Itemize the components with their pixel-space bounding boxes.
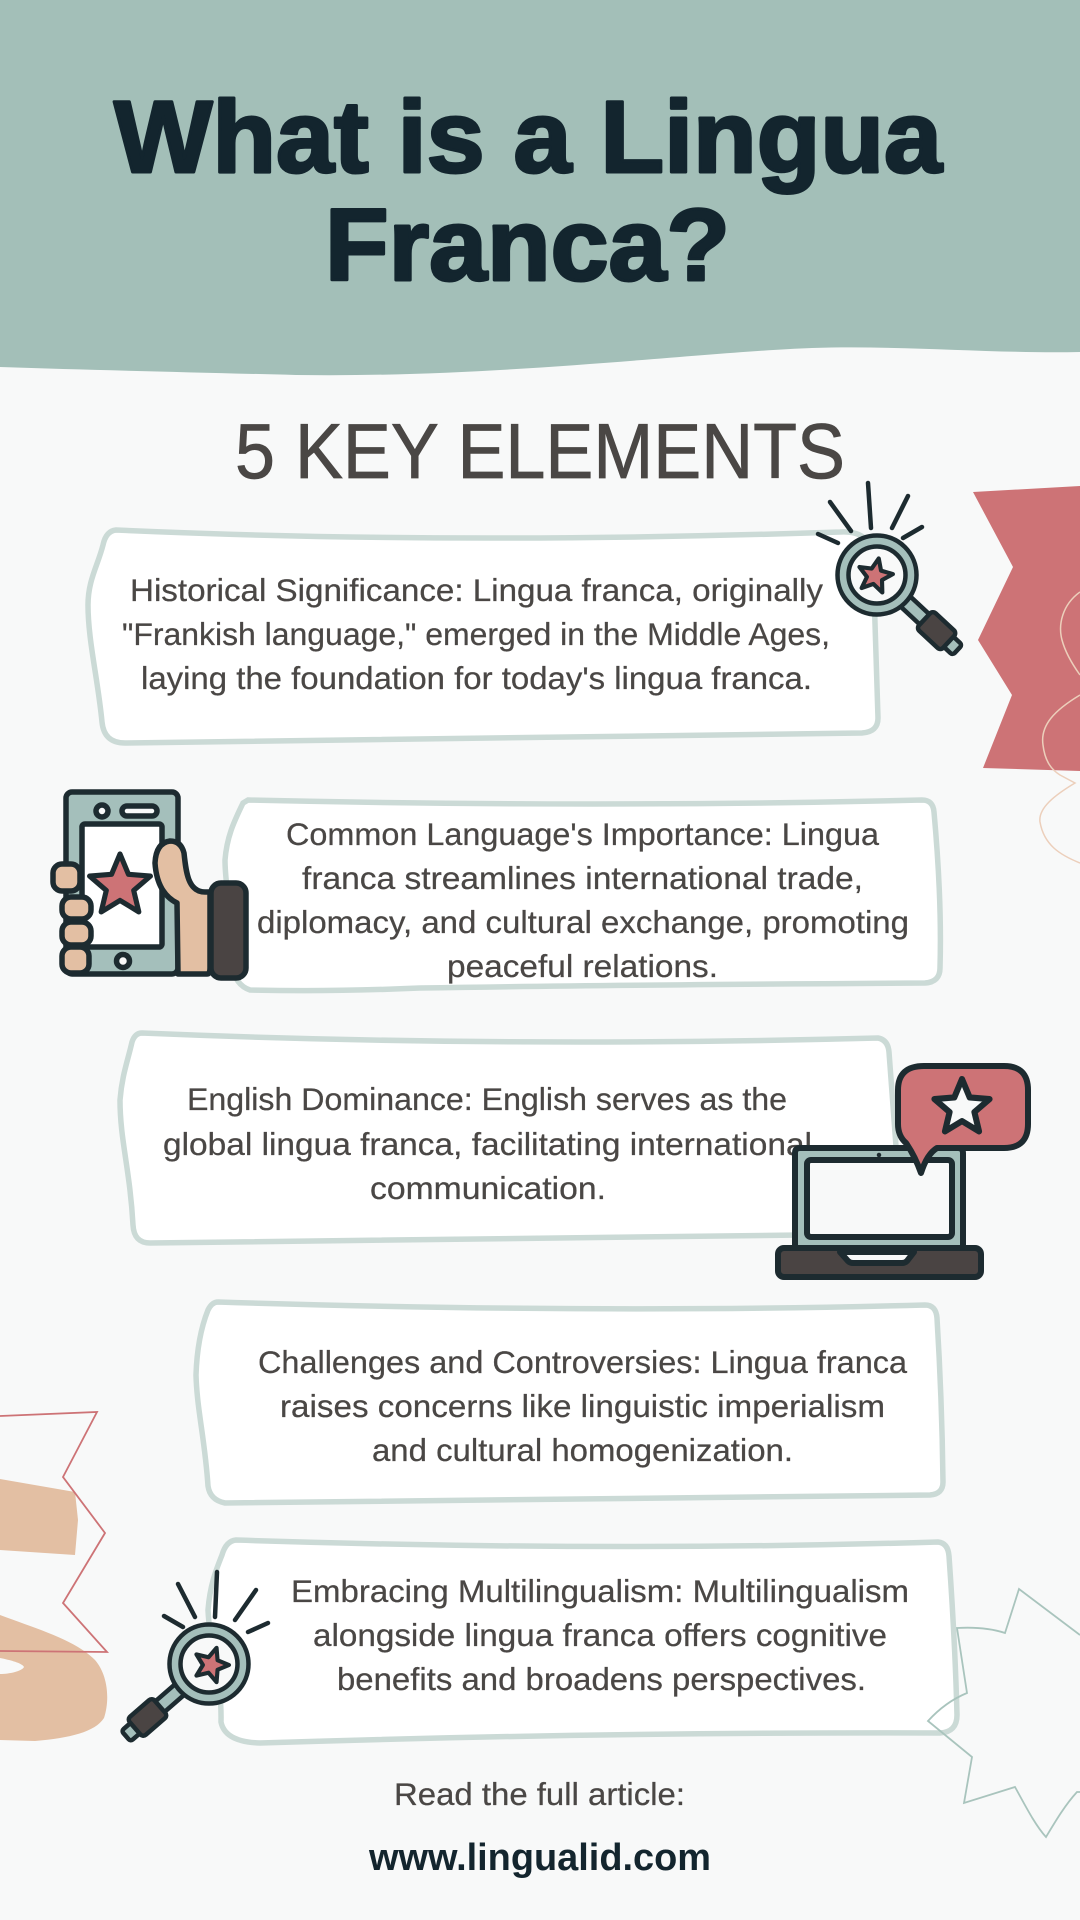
panel: common language's importance: Common Language's Importance: Lingua	[286, 816, 879, 852]
panel: english dominance: global lingua franca, facilitating international	[163, 1126, 812, 1162]
title: What is a Lingua	[114, 80, 943, 194]
decorative outline star right	[928, 1589, 1080, 1837]
panel: common language's importance: peaceful relations.	[447, 948, 718, 984]
panel: historical significance	[88, 530, 878, 743]
panel: embracing multilingualism	[208, 1540, 957, 1743]
header banner	[0, 0, 1080, 375]
decorative peach shapes left	[0, 1412, 107, 1741]
panel: common language's importance: diplomacy, and cultural exchange, promoting	[257, 904, 909, 940]
icon: magnifier top	[818, 483, 966, 659]
title	[114, 80, 943, 302]
title: Franca?	[325, 188, 730, 302]
panel: english dominance: English Dominance: English serves as the	[187, 1081, 787, 1117]
panel: embracing multilingualism: benefits and broadens perspectives.	[337, 1661, 866, 1697]
panel: english dominance	[120, 1033, 900, 1243]
panel: challenges and controversies: raises concerns like linguistic imperialism	[280, 1388, 885, 1424]
decorative red ribbon right	[973, 486, 1080, 863]
icon: laptop with star bubble	[778, 1066, 1028, 1277]
panel: historical significance: Historical Significance: Lingua franca, originally	[130, 572, 823, 608]
panel: embracing multilingualism: Embracing Multilingualism: Multilingualism	[291, 1573, 909, 1609]
panel: challenges and controversies: and cultural homogenization.	[372, 1432, 793, 1468]
panel: embracing multilingualism: alongside lingua franca offers cognitive	[313, 1617, 887, 1653]
icon: magnifier bottom	[118, 1572, 268, 1745]
panel: common language's importance	[225, 800, 940, 991]
footer: website: www.lingualid.com	[368, 1837, 711, 1879]
panel: historical significance: "Frankish language," emerged in the Middle Ages,	[122, 616, 830, 652]
footer: read the full article: Read the full article:	[394, 1776, 685, 1812]
panel: challenges and controversies	[196, 1302, 943, 1503]
panel: historical significance: laying the foundation for today's lingua franca.	[141, 660, 812, 696]
panel: challenges and controversies: Challenges and Controversies: Lingua franca	[258, 1344, 907, 1380]
panel: common language's importance: franca streamlines international trade,	[302, 860, 863, 896]
subtitle: 5 key elements: 5 KEY ELEMENTS	[235, 407, 845, 495]
icon: phone in hand	[53, 792, 246, 978]
panel: english dominance: communication.	[370, 1170, 606, 1206]
